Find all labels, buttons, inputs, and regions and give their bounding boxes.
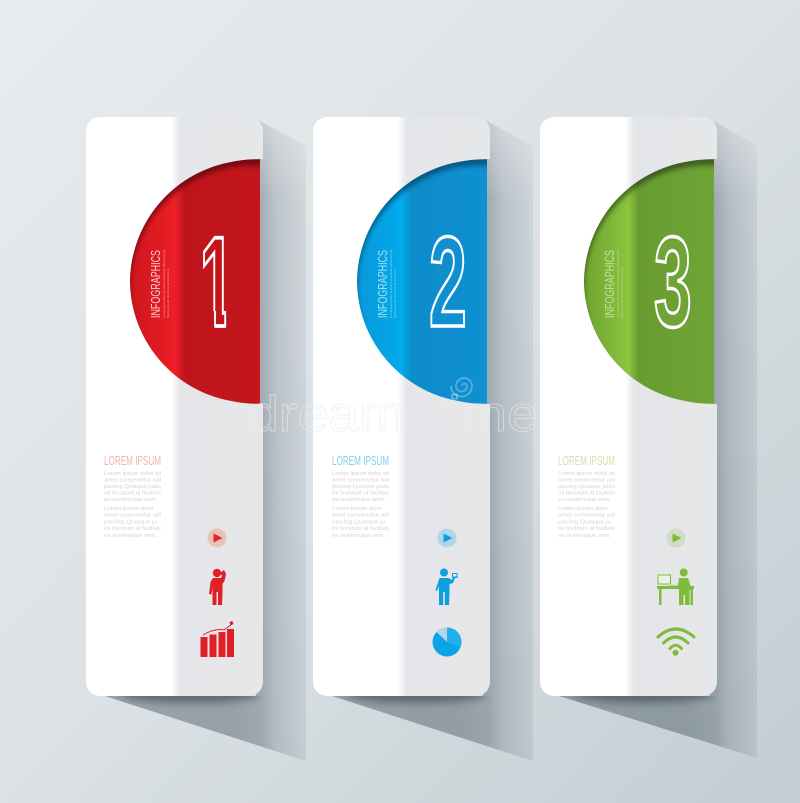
card 1 body text: Lorem ipsum dolor xyxy=(104,506,154,512)
card 1 vertical infographics label: Lorem ipsum dolor sit amet consectetur adipiscing elit xyxy=(162,250,166,318)
panel: card 1 xyxy=(86,117,306,761)
watermark: dreamstime xyxy=(248,386,538,442)
icon: person at desk with computer xyxy=(657,568,694,605)
card 1 long shadow xyxy=(105,119,306,761)
card 2 body text: eu scelerisque sem. xyxy=(332,497,386,503)
card 1 body text xyxy=(104,471,162,539)
card 2 white folded body xyxy=(313,117,490,696)
icon: pie chart xyxy=(432,628,462,656)
card 1 number 1: 1 xyxy=(200,212,234,354)
card 3 vertical infographics label xyxy=(602,250,624,318)
card 2 long shadow xyxy=(332,119,533,761)
card 3 body text: eu scelerisque sem. xyxy=(558,533,612,539)
card 1 body text: eu scelerisque sem. xyxy=(104,533,158,539)
card 2 body text: Lorem ipsum dolor xyxy=(332,506,382,512)
card 2 body text: amet consectetur adi xyxy=(332,478,389,484)
card 2 number 2: 2 xyxy=(429,210,467,353)
card 3 number 3: 3 xyxy=(654,210,692,353)
card 1 heading: LOREM IPSUM xyxy=(104,453,161,468)
card 2 body text: piscing Quisque ju xyxy=(332,520,385,526)
card 1 red half circle xyxy=(130,159,260,404)
card 3 vertical infographics label: INFOGRAPHICS xyxy=(602,250,617,318)
panel: card 2 xyxy=(313,117,533,761)
card 3 body text: mi tincidunt at facilisis xyxy=(558,526,615,532)
card 3 body text: eu scelerisque sem. xyxy=(558,497,612,503)
card 1 body text: Lorem ipsum dolor sit xyxy=(104,471,162,477)
card 1 body text: eu scelerisque sem. xyxy=(104,497,158,503)
icon: person with tablet xyxy=(436,568,458,605)
card 1 body text: mi tincidunt at facilisis xyxy=(104,490,161,496)
card 2 heading: LOREM IPSUM xyxy=(332,453,389,468)
card 3 body text: amet consectetur adi xyxy=(558,512,615,518)
icon: person on phone xyxy=(209,569,226,605)
icon: play button xyxy=(666,528,686,548)
card 2 vertical infographics label: Lorem ipsum dolor sit amet consectetur adipiscing elit xyxy=(389,250,393,318)
card 3 green half circle xyxy=(584,159,714,404)
card 1 vertical infographics label: Quisque justo tincidunt at facilisis eu xyxy=(166,268,170,318)
card 1 number 1 xyxy=(203,236,226,328)
card 3 body text: Lorem ipsum dolor sit xyxy=(558,471,616,477)
card 1 body text: amet consectetur adi xyxy=(104,512,161,518)
card 2 vertical infographics label: INFOGRAPHICS xyxy=(375,250,390,318)
card 2 body text xyxy=(332,471,390,539)
card 1 vertical infographics label xyxy=(148,250,170,318)
icon: wifi signal xyxy=(658,629,694,656)
card 3 white folded body xyxy=(540,117,717,696)
card 3 vertical infographics label: Quisque justo tincidunt at facilisis eu xyxy=(620,268,624,318)
card 2 blue half circle xyxy=(357,159,487,404)
card 2 body text: piscing Quisque justo xyxy=(332,484,389,490)
card 2 vertical infographics label xyxy=(375,250,397,318)
card 2 vertical infographics label: Quisque justo tincidunt at facilisis eu xyxy=(393,268,397,318)
card 2 body text: mi tincidunt at facilisis xyxy=(332,490,389,496)
icon: play button xyxy=(438,528,456,548)
icon: play button xyxy=(208,528,226,548)
card 3 heading: LOREM IPSUM xyxy=(558,453,615,468)
card 2 body text: mi tincidunt at facilisis xyxy=(332,526,389,532)
icon: rising bar chart xyxy=(200,621,234,657)
card 1 body text: piscing Quisque justo xyxy=(104,484,161,490)
card 2 body text: Lorem ipsum dolor sit xyxy=(332,471,390,477)
card 3 long shadow xyxy=(559,119,757,758)
card 1 body text: amet consectetur adi xyxy=(104,478,161,484)
card 2 body text: amet consectetur adi xyxy=(332,512,389,518)
card 3 body text: mi tincidunt at facilisis xyxy=(558,490,615,496)
card 3 body text: Lorem ipsum dolor xyxy=(558,506,608,512)
card 1 body text: mi tincidunt at facilisis xyxy=(104,526,161,532)
panel: card 3 xyxy=(540,117,757,758)
card 3 body text xyxy=(558,471,616,539)
card 3 body text: amet consectetur adi xyxy=(558,478,615,484)
card 2 body text: eu scelerisque sem. xyxy=(332,533,386,539)
card 1 vertical infographics label: INFOGRAPHICS xyxy=(148,250,163,318)
card 3 body text: piscing Quisque justo xyxy=(558,484,615,490)
card 1 body text: piscing Quisque ju xyxy=(104,520,157,526)
card 1 white folded body xyxy=(86,117,263,696)
watermark: dreamstime xyxy=(248,386,538,442)
card 3 body text: piscing Quisque ju xyxy=(558,520,611,526)
card 3 vertical infographics label: Lorem ipsum dolor sit amet consectetur adipiscing elit xyxy=(616,250,620,318)
